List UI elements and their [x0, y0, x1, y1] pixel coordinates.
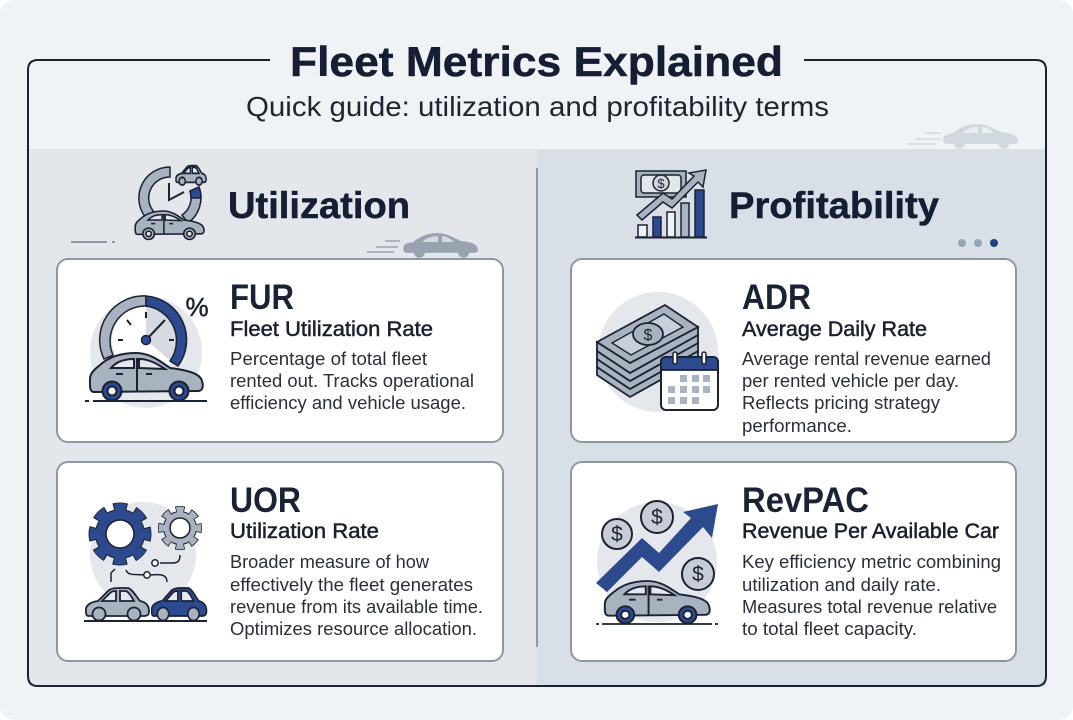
- text: Fleet Utilization Rate: Fleet Utilization Rate: [230, 318, 433, 341]
- text: UOR description: [230, 551, 483, 639]
- icon: gauge with car: [85, 292, 209, 408]
- heading: Utilization: Utilization: [228, 185, 410, 226]
- icon: gauge with car: %: [185, 292, 209, 322]
- text: ADR description: performance.: [742, 415, 852, 436]
- text: RevPAC description: Measures total revenue relative: [742, 596, 997, 617]
- text: UOR description: Optimizes resource allocation.: [230, 618, 477, 639]
- text: RevPAC description: Key efficiency metric combining: [742, 551, 1001, 572]
- title: Fleet Metrics Explained: [290, 38, 783, 85]
- text: FUR description: rented out. Tracks operational: [230, 370, 474, 391]
- text: FUR description: [230, 348, 474, 413]
- heading: Profitability: Profitability: [729, 185, 939, 226]
- text: ADR description: Reflects pricing strategy: [742, 392, 941, 413]
- icon: money and growth chart: [635, 170, 707, 238]
- text: UOR description: revenue from its available time.: [230, 596, 483, 617]
- icon: rising arrow, coins and car: $: [651, 506, 663, 529]
- panel: FUR card: [57, 259, 503, 442]
- subtitle: Quick guide: utilization and profitability terms: [246, 91, 829, 122]
- icon: rising arrow, coins and car: $: [611, 523, 623, 546]
- text: ADR: ADR: [742, 278, 811, 317]
- text: RevPAC: RevPAC: [742, 481, 869, 520]
- text: RevPAC description: [742, 551, 1001, 639]
- icon: rising arrow, coins and car: [596, 501, 718, 624]
- panel: RevPAC card: [571, 462, 1016, 661]
- text: ADR description: Average rental revenue earned: [742, 348, 991, 369]
- text: UOR description: Broader measure of how: [230, 551, 430, 572]
- icon: money and growth chart: $: [657, 176, 665, 191]
- text: UOR: UOR: [230, 481, 301, 520]
- decorative dash: [71, 241, 115, 243]
- text: FUR description: efficiency and vehicle usage.: [230, 392, 466, 413]
- column divider: [536, 168, 538, 647]
- text: Utilization Rate: Utilization Rate: [230, 520, 379, 543]
- indicator dots: [958, 239, 998, 247]
- text: UOR description: effectively the fleet generates: [230, 574, 473, 595]
- icon: money stack and calendar: $: [644, 327, 653, 344]
- text: RevPAC description: to total fleet capacity.: [742, 618, 917, 639]
- panel: UOR card: [57, 462, 503, 661]
- text: ADR description: [742, 348, 991, 436]
- text: ADR description: per rented vehicle per day.: [742, 370, 959, 391]
- icon: ghost car top right: [908, 124, 1018, 149]
- text: FUR description: Percentage of total fleet: [230, 348, 427, 369]
- text: Average Daily Rate: Average Daily Rate: [742, 318, 927, 341]
- icon: money stack and calendar: [597, 292, 718, 412]
- icon: clock and cars: [135, 166, 206, 240]
- icon: ghost car utilization: [367, 233, 478, 258]
- panel: profitability background: [537, 149, 1046, 686]
- text: FUR: FUR: [230, 278, 294, 317]
- text: Revenue Per Available Car: Revenue Per Available Car: [742, 520, 999, 543]
- text: RevPAC description: utilization and daily rate.: [742, 574, 941, 595]
- icon: rising arrow, coins and car: $: [692, 563, 704, 586]
- panel: ADR card: [571, 259, 1016, 442]
- icon: gears and cars: [84, 502, 207, 621]
- panel: utilization background: [28, 149, 537, 686]
